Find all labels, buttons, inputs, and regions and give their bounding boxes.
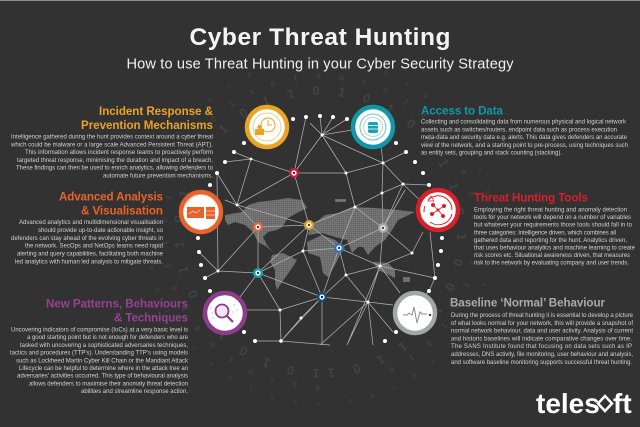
panel: threat hunting tools — [474, 192, 636, 267]
panel: threat hunting tools: that uses behaviour analytics and machine learning to create — [474, 246, 636, 252]
panel: incident response — [10, 105, 214, 180]
panel: new patterns: adversaries' activities occurred. This type of behavioural analysis — [17, 374, 188, 380]
subtitle: How to use Threat Hunting in your Cyber Security Strategy — [126, 56, 514, 72]
panel: advanced analysis: Advanced analytics and multidimensional visualisation — [19, 220, 163, 226]
panel: advanced analysis: & Visualisation — [81, 204, 163, 218]
panel: access to data — [421, 104, 628, 157]
panel: baseline behaviour: addresses, DNS activity, file monitoring, user behaviour and analysis, — [451, 352, 633, 358]
panel: access to data: Collecting and consolidating data from numerous physical and logical network — [421, 120, 627, 126]
panel: baseline behaviour — [450, 296, 634, 366]
panel: new patterns: tactics and procedures (TTP's). Understanding TTP's using models — [10, 351, 188, 357]
panel: incident response: These findings can then be used to enrich analytics, allowing defenders to — [16, 166, 214, 172]
panel: new patterns: tasked with uncovering a sophisticated adversaries techniques, — [20, 343, 188, 349]
icon: baseline pulse — [395, 293, 435, 333]
dotted world map — [225, 198, 415, 290]
panel: advanced analysis: alerting and query capabilities, facilitating both machine — [17, 252, 164, 258]
panel: incident response: targeted threat response, minimising the duration and impact of a breach. — [17, 158, 213, 164]
title: Cyber Threat Hunting — [190, 24, 450, 51]
panel: baseline behaviour: and historic baselines will indicate comparative changes over time. — [451, 336, 632, 342]
panel: new patterns: allows defenders to maximise their anomaly threat detection — [29, 381, 188, 387]
panel: access to data: meta-data and security data e.g. alerts. This data gives defenders an accurate — [421, 135, 628, 141]
logo: telesoft — [536, 388, 632, 419]
panel: new patterns: & Techniques — [114, 312, 188, 324]
network nodes: white — [196, 114, 444, 343]
panel: new patterns: a good starting point but is not enough for defenders who are — [27, 335, 189, 341]
panel: new patterns: New Patterns, Behaviours — [46, 298, 188, 310]
panel: incident response: This information allows incident response teams to proactively perform — [25, 150, 213, 156]
icon: threat hunting radar — [418, 190, 458, 230]
panel: threat hunting tools: risk to the network by evaluating company and user trends. — [474, 261, 629, 267]
panel: new patterns — [10, 298, 189, 395]
panel: baseline behaviour: of what looks normal for your network, this will provide a snapshot of — [451, 321, 633, 327]
icon: new patterns magnifier — [205, 293, 245, 333]
panel: advanced analysis: Advanced Analysis — [59, 190, 163, 204]
panel: access to data: view of the network, and a starting point to pre-process, using techniques such — [421, 143, 628, 149]
background binary rings: 1 0 0 1 0 1 1 0 1 0 0 1 0 1 1 0 1 0 0 1 0 1 1 0 1 0 0 1 0 1 1 0 1 0 0 1 0 1 1 0 1 0 0 1 0 1 — [146, 58, 494, 406]
icon: advanced analysis screens — [181, 192, 221, 232]
panel: baseline behaviour: normal network behaviour, data and user activity. Analysis of current — [451, 329, 633, 335]
panel: advanced analysis: led analytics with human led analysis to mitigate threats. — [15, 260, 163, 266]
panel: access to data: Access to Data — [421, 104, 504, 118]
panel: threat hunting tools: three categories: Intelligence driven, which combines all — [474, 230, 616, 236]
panel: incident response: Intelligence gathered during the hunt provides context around a cyber threat — [11, 134, 213, 140]
panel: new patterns: Uncovering indicators of compromise (IoCs) at a very basic level is — [11, 328, 188, 334]
panel: threat hunting tools: gathered data and reporting for the hunt. Analytics driven, — [474, 238, 627, 244]
panel: advanced analysis: the network. SecOps and NetOps teams need rapid — [25, 244, 163, 250]
panel: threat hunting tools: but whatever your requirements those tools should fall in to — [474, 223, 633, 229]
panel: access to data: assets such as switches/routers, endpoint data such as process execution — [421, 127, 617, 133]
network lines — [199, 116, 435, 345]
panel: threat hunting tools: tools for your network will depend on a number of variables — [474, 215, 631, 221]
panel: baseline behaviour: and software baseline monitoring supports successful threat hunting. — [451, 360, 632, 366]
panel: advanced analysis: defenders can stay ahead of the evolving cyber threats in — [11, 236, 163, 242]
panel: baseline behaviour: Baseline ‘Normal’ Behaviour — [450, 296, 605, 310]
panel: advanced analysis: should provide up-to-date actionable insight, so — [38, 228, 164, 234]
background binary rings: 0 1 1 0 1 0 0 1 0 1 1 0 1 0 0 1 0 1 1 0 1 0 0 1 0 1 1 0 1 0 0 1 0 1 1 0 1 0 1 0 — [162, 74, 478, 390]
panel: incident response: which could be malware or a large scale Advanced Persistent Threat (APT). — [10, 142, 213, 148]
panel: incident response: Incident Response & — [99, 105, 214, 118]
panel: incident response: Prevention Mechanisms — [81, 119, 213, 132]
panel: threat hunting tools: Employing the right threat hunting and anomaly detection — [474, 208, 627, 214]
panel: threat hunting tools: risk scores etc. Situational awareness driven, that measures — [474, 253, 630, 259]
panel: new patterns: Lifecycle can be helpful to determine where in the attack tree an — [19, 366, 188, 372]
panel: new patterns: such as Lockheed Martin Cyber Kill Chain or the Mandiant Attack — [16, 358, 189, 364]
network nodes: coloured hubs — [253, 168, 388, 302]
panel: advanced analysis — [11, 190, 164, 266]
logo: telesoft: teles — [536, 388, 600, 419]
panel: access to data: as entity sets, grouping and stack counting (stacking). — [421, 151, 562, 157]
icon: incident response clock — [247, 107, 287, 147]
panel: new patterns: abilities and streamline response action. — [81, 389, 188, 395]
panel: baseline behaviour: During the process of threat hunting it is essential to develop a picture — [451, 313, 634, 319]
panel: incident response: automate future prevention mechanisms. — [103, 174, 213, 180]
panel: threat hunting tools: Threat Hunting Tools — [474, 192, 588, 204]
icon: access to data database — [353, 107, 393, 147]
panel: baseline behaviour: The SANS Institute found that focusing on data sets such as IP — [451, 344, 632, 350]
logo: telesoft: ft — [613, 388, 632, 419]
